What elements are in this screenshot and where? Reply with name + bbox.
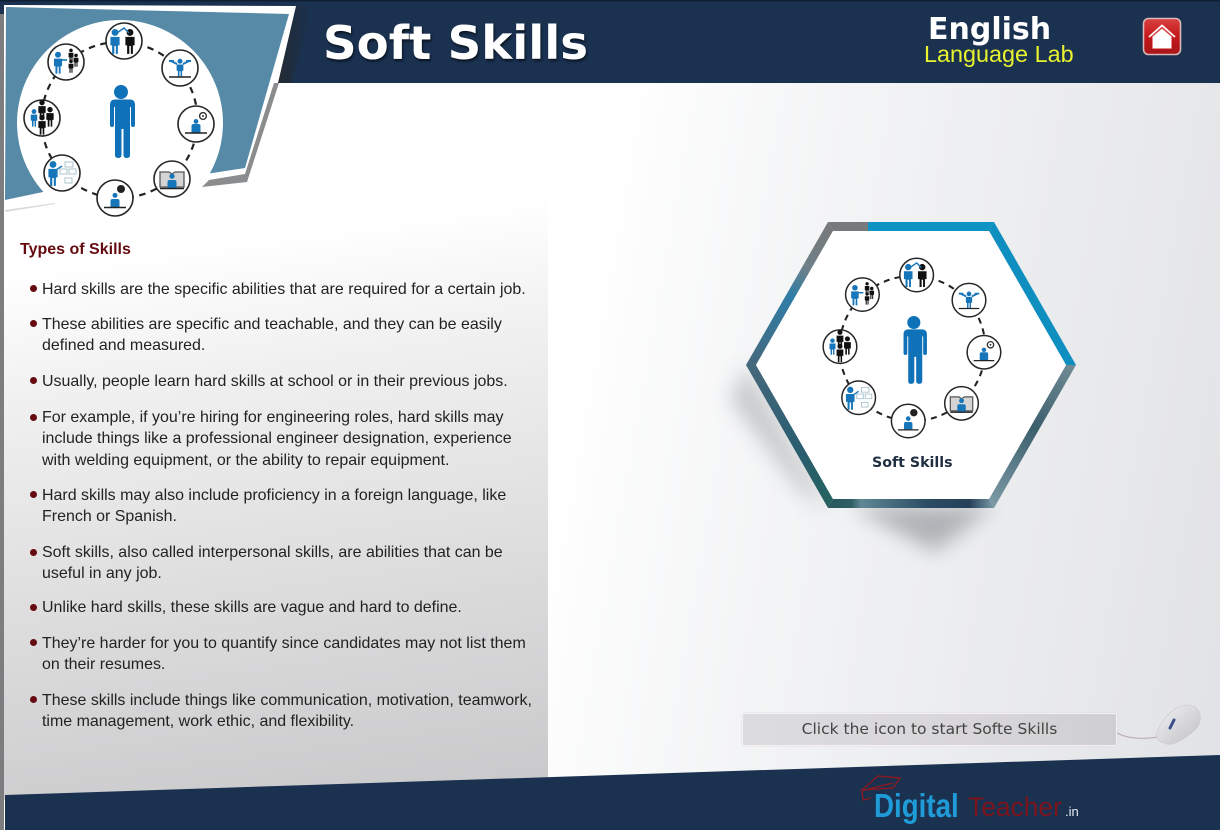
left edge strip — [0, 14, 4, 830]
bullet list: defined and measured. — [42, 337, 205, 354]
bullet list: For example, if you’re hiring for engineering roles, hard skills may — [42, 409, 504, 426]
panel: text background — [4, 190, 548, 800]
bullet list: useful in any job. — [42, 565, 162, 582]
hexagon card — [746, 222, 1076, 508]
bullet list: Unlike hard skills, these skills are vague and hard to define. — [42, 599, 462, 616]
page title: Soft Skills — [323, 17, 588, 71]
bullet list: Soft skills, also called interpersonal skills, are abilities that can be — [42, 544, 503, 561]
bullet list: Hard skills may also include proficiency in a foreign language, like — [42, 487, 506, 504]
bullet list: Usually, people learn hard skills at school or in their previous jobs. — [42, 373, 508, 390]
bottom band — [5, 755, 1220, 830]
bullet list: These skills include things like communication, motivation, teamwork, — [42, 692, 532, 709]
bullet list: They’re harder for you to quantify since candidates may not list them — [42, 635, 526, 652]
mouse icon — [1117, 705, 1200, 744]
instruction button: Click the icon to start Softe Skills — [802, 720, 1057, 738]
banner skills ring icon — [24, 23, 214, 216]
bullet list: include things like a professional engineer designation, experience — [42, 430, 512, 447]
instruction button — [742, 713, 1117, 746]
bullet list: These abilities are specific and teachable, and they can be easily — [42, 316, 502, 333]
bullet list: French or Spanish. — [42, 508, 177, 525]
logo word: Teacher: Teacher — [968, 792, 1062, 822]
logo text — [874, 787, 1079, 824]
hexagon shadows — [730, 365, 994, 552]
banner white frame — [4, 5, 296, 212]
bullet list — [30, 281, 532, 730]
banner underline stroke — [5, 203, 55, 212]
bullet list: with welding equipment, or the ability to repair equipment. — [42, 452, 449, 469]
hexagon skills ring icon — [823, 258, 1001, 438]
bullet list: on their resumes. — [42, 656, 165, 673]
logo word: Digital: Digital — [874, 787, 959, 824]
banner white circle — [17, 20, 223, 226]
home button — [1144, 18, 1180, 54]
logo suffix: .in — [1065, 804, 1079, 819]
banner grey edge — [202, 83, 279, 187]
header corner shade — [278, 6, 312, 83]
bullet list: time management, work ethic, and flexibility. — [42, 713, 354, 730]
banner blue panel — [5, 7, 289, 200]
heading: types of skills: Types of Skills — [20, 240, 131, 258]
bullet list: Hard skills are the specific abilities that are required for a certain job. — [42, 281, 526, 298]
hexagon caption: Soft Skills — [872, 455, 953, 471]
English label: English — [928, 12, 1051, 47]
graduation cap logo — [862, 776, 900, 800]
Language Lab label: Language Lab — [924, 41, 1074, 67]
